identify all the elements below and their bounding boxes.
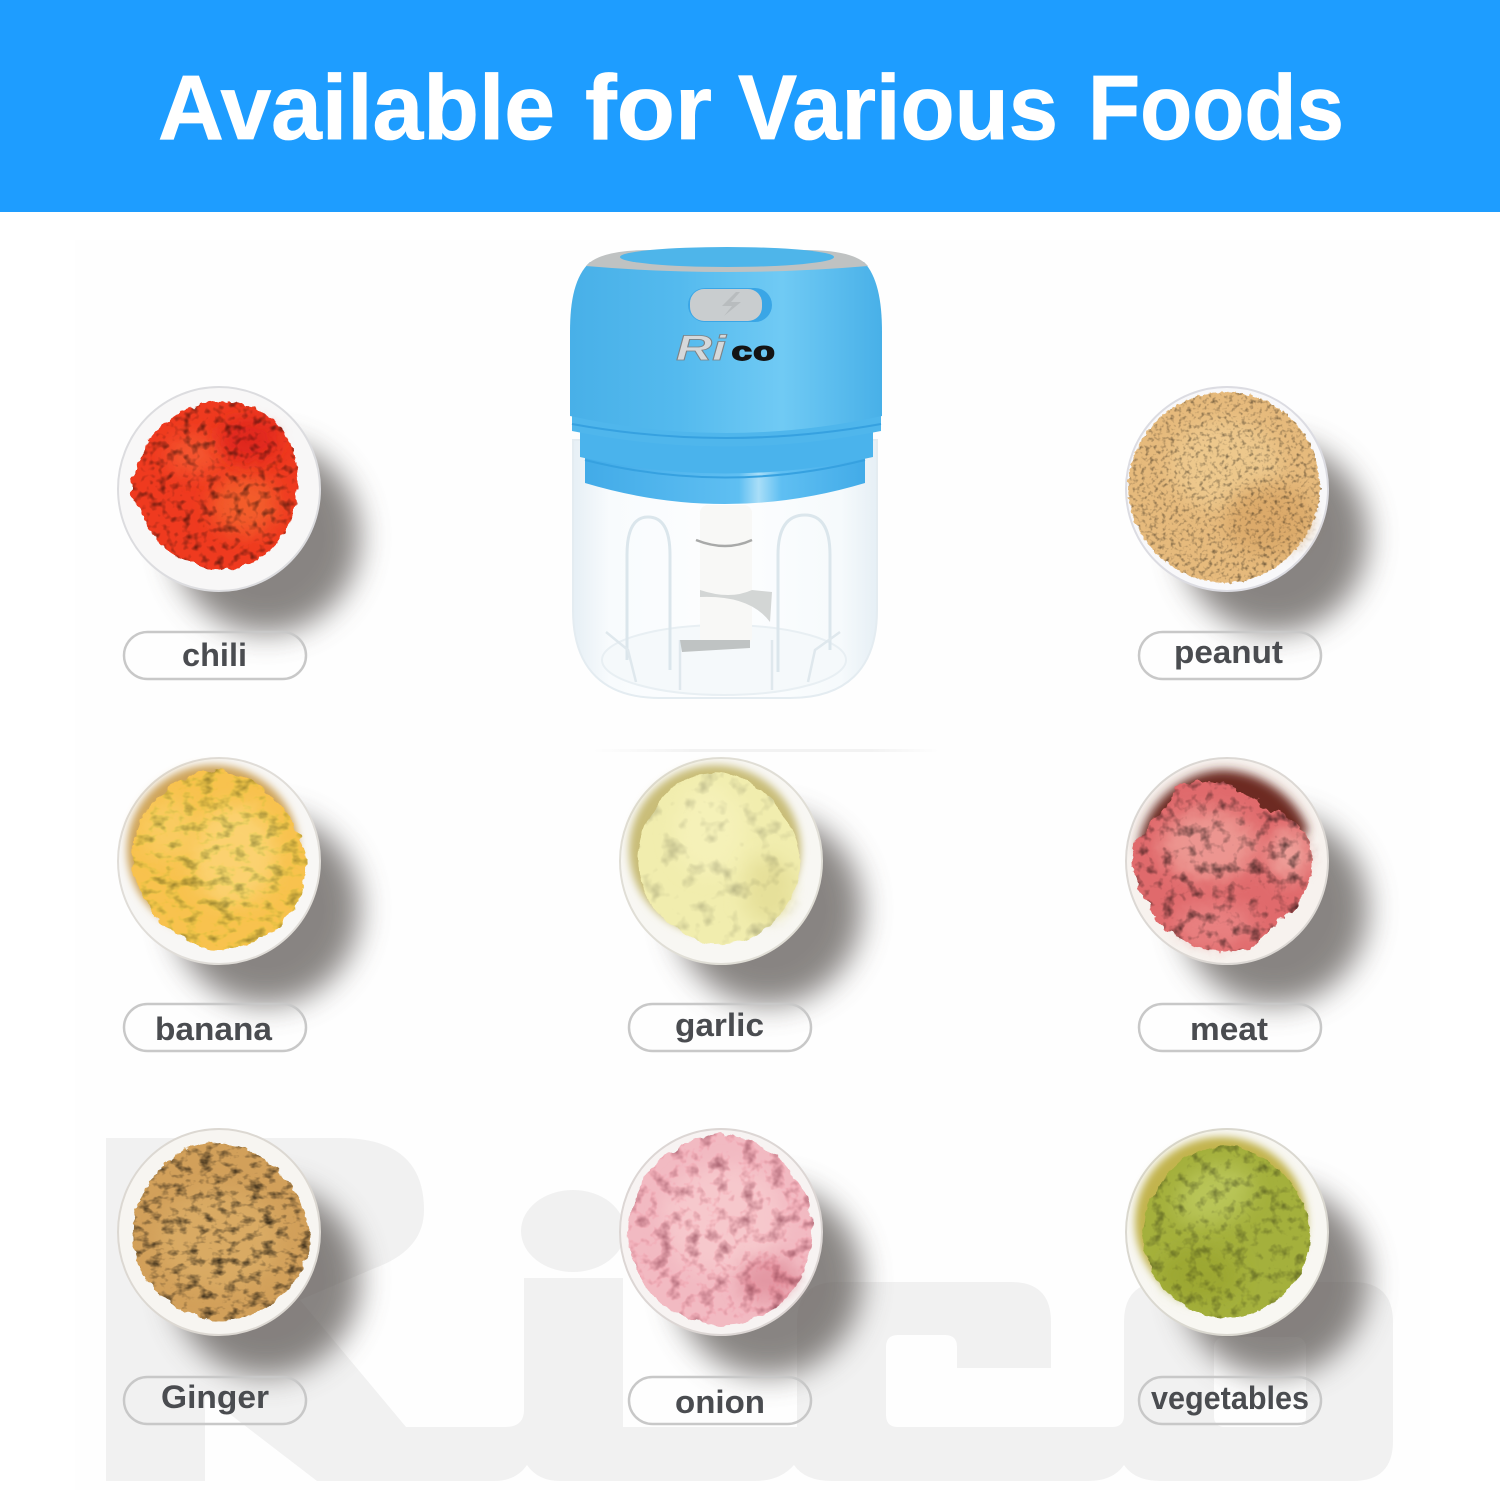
lower blade [700, 590, 772, 622]
bottom blade [680, 640, 750, 652]
food bowl: peanut [1126, 387, 1368, 633]
food bowl: Ginger [118, 1129, 360, 1376]
label: banana [124, 1004, 306, 1051]
label: Ginger [124, 1377, 306, 1424]
title [158, 57, 1344, 159]
label: onion [629, 1377, 811, 1424]
title: Available [158, 57, 555, 159]
neck ring line [585, 460, 865, 478]
label: garlic [629, 1004, 811, 1051]
brand logo [676, 329, 775, 368]
food bowl: meat [1126, 758, 1368, 1005]
title banner [0, 0, 1500, 212]
power button [688, 288, 772, 322]
lower neck [585, 450, 865, 504]
label: vegetables: vegetables [1151, 1380, 1309, 1416]
food bowl: garlic [620, 758, 862, 1005]
collar line [572, 424, 881, 438]
left inner rib [627, 517, 670, 670]
watermark: Rico [106, 1138, 1393, 1481]
grey lid ring [586, 250, 868, 272]
glass jar [573, 440, 877, 698]
label: Ginger: Ginger [161, 1379, 269, 1415]
label: meat: meat [1190, 1011, 1268, 1047]
motor body [570, 262, 882, 433]
lightning icon [722, 292, 741, 316]
upper neck [580, 428, 873, 474]
product: Rico mini food chopper [570, 247, 882, 698]
label: vegetables [1139, 1377, 1321, 1424]
food bowl: chili [118, 387, 360, 633]
left base flutes [606, 632, 680, 690]
label: garlic: garlic [675, 1007, 764, 1043]
title: Foods [1088, 57, 1344, 159]
right base flutes [772, 632, 840, 690]
upper blade [696, 540, 752, 546]
label: onion: onion [675, 1384, 765, 1420]
food bowl: onion [620, 1129, 862, 1376]
title: for [585, 57, 712, 159]
brand logo: co [731, 338, 775, 368]
faint line under product [590, 749, 940, 752]
food bowl: vegetables [1126, 1129, 1368, 1376]
label: meat [1139, 1004, 1321, 1051]
label: chili: chili [182, 637, 247, 673]
brand logo: Ri [676, 329, 728, 368]
title: Various [738, 57, 1058, 159]
right inner rib [778, 515, 830, 672]
label: chili [124, 632, 306, 679]
label: peanut [1139, 632, 1321, 679]
jar base ellipse [602, 625, 846, 695]
lid top [620, 247, 834, 267]
food bowl: banana [118, 758, 360, 1005]
label: peanut: peanut [1174, 634, 1283, 670]
label: banana: banana [155, 1011, 272, 1047]
faint off-white panel [75, 240, 1430, 1490]
blade shaft [700, 505, 752, 645]
collar [572, 414, 881, 446]
